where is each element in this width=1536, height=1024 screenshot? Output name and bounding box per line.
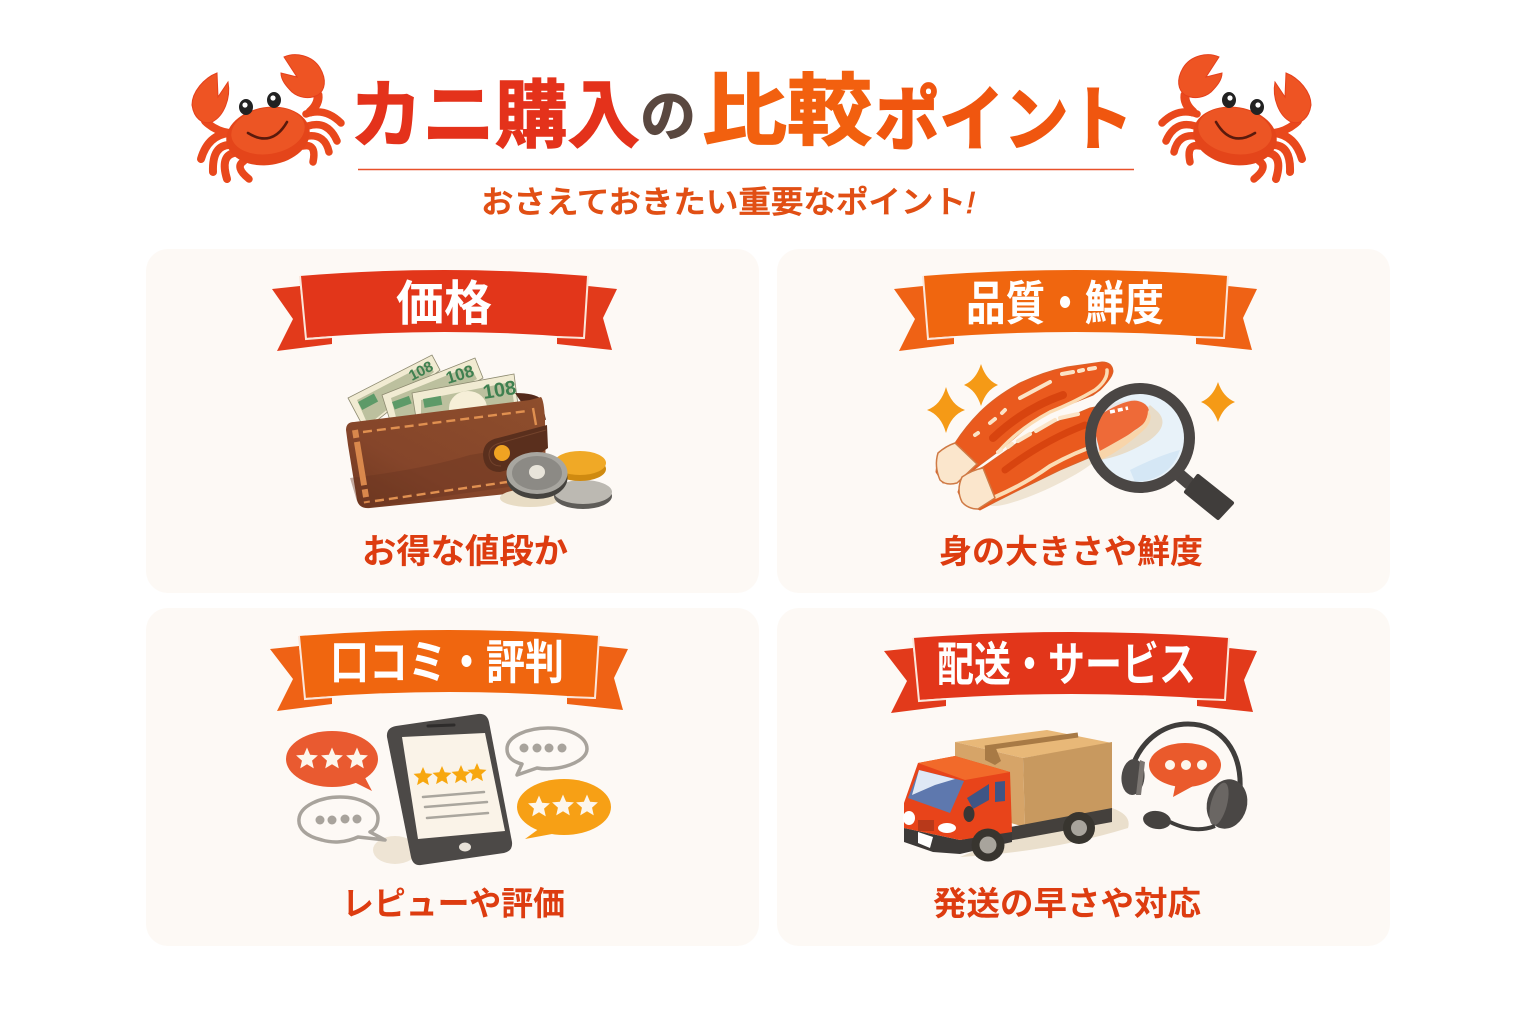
panel: quality and freshness <box>777 249 1390 593</box>
bubble: grey outline upper right <box>507 728 587 775</box>
subtitle: おさえておきたい重要なポイント ! <box>481 185 975 220</box>
phone <box>387 714 512 865</box>
icon: crab left <box>192 55 341 179</box>
title: の <box>640 85 696 148</box>
title: ポイント <box>875 81 1133 159</box>
icon: crab legs, magnifier and sparkles <box>927 362 1235 518</box>
banner: reviews: 口コミ・評判 <box>330 636 564 689</box>
panel: reviews <box>146 608 759 946</box>
icon: wallet with banknotes and coins: 108 <box>444 361 476 388</box>
caption: price: お得な値段か <box>362 533 568 571</box>
banner: delivery: 配送・サービス <box>937 638 1196 691</box>
panel: delivery and service <box>777 608 1390 946</box>
caption: quality: 身の大きさや鮮度 <box>939 533 1203 570</box>
banner: price: 価格 <box>396 278 492 331</box>
caption: delivery: 発送の早さや対応 <box>933 885 1201 922</box>
icon: smartphone with rating bubbles <box>286 714 611 865</box>
title: 比較 <box>702 67 872 155</box>
banner: price <box>272 270 617 351</box>
title underline <box>358 168 1134 170</box>
icon: delivery truck <box>903 730 1129 862</box>
icon: wallet with banknotes and coins: 108 <box>406 358 436 385</box>
bubble: orange rating <box>517 779 611 839</box>
banner: quality: 品質・鮮度 <box>966 277 1164 330</box>
caption: reviews: レピューや評価 <box>342 885 565 922</box>
title <box>350 67 1133 159</box>
banner: delivery <box>884 632 1257 713</box>
bubble: red rating <box>286 731 378 791</box>
icon: crab right <box>1162 55 1311 179</box>
banner: reviews <box>270 630 628 711</box>
bubble: grey outline lower left <box>299 797 385 842</box>
banner: quality <box>894 270 1257 351</box>
icon: headset with speech bubble <box>1120 724 1253 833</box>
icon: wallet with banknotes and coins: 108 <box>481 377 518 404</box>
title: カニ購入 <box>350 74 640 157</box>
icon: wallet with banknotes and coins <box>346 355 612 509</box>
panel: price <box>146 249 759 593</box>
